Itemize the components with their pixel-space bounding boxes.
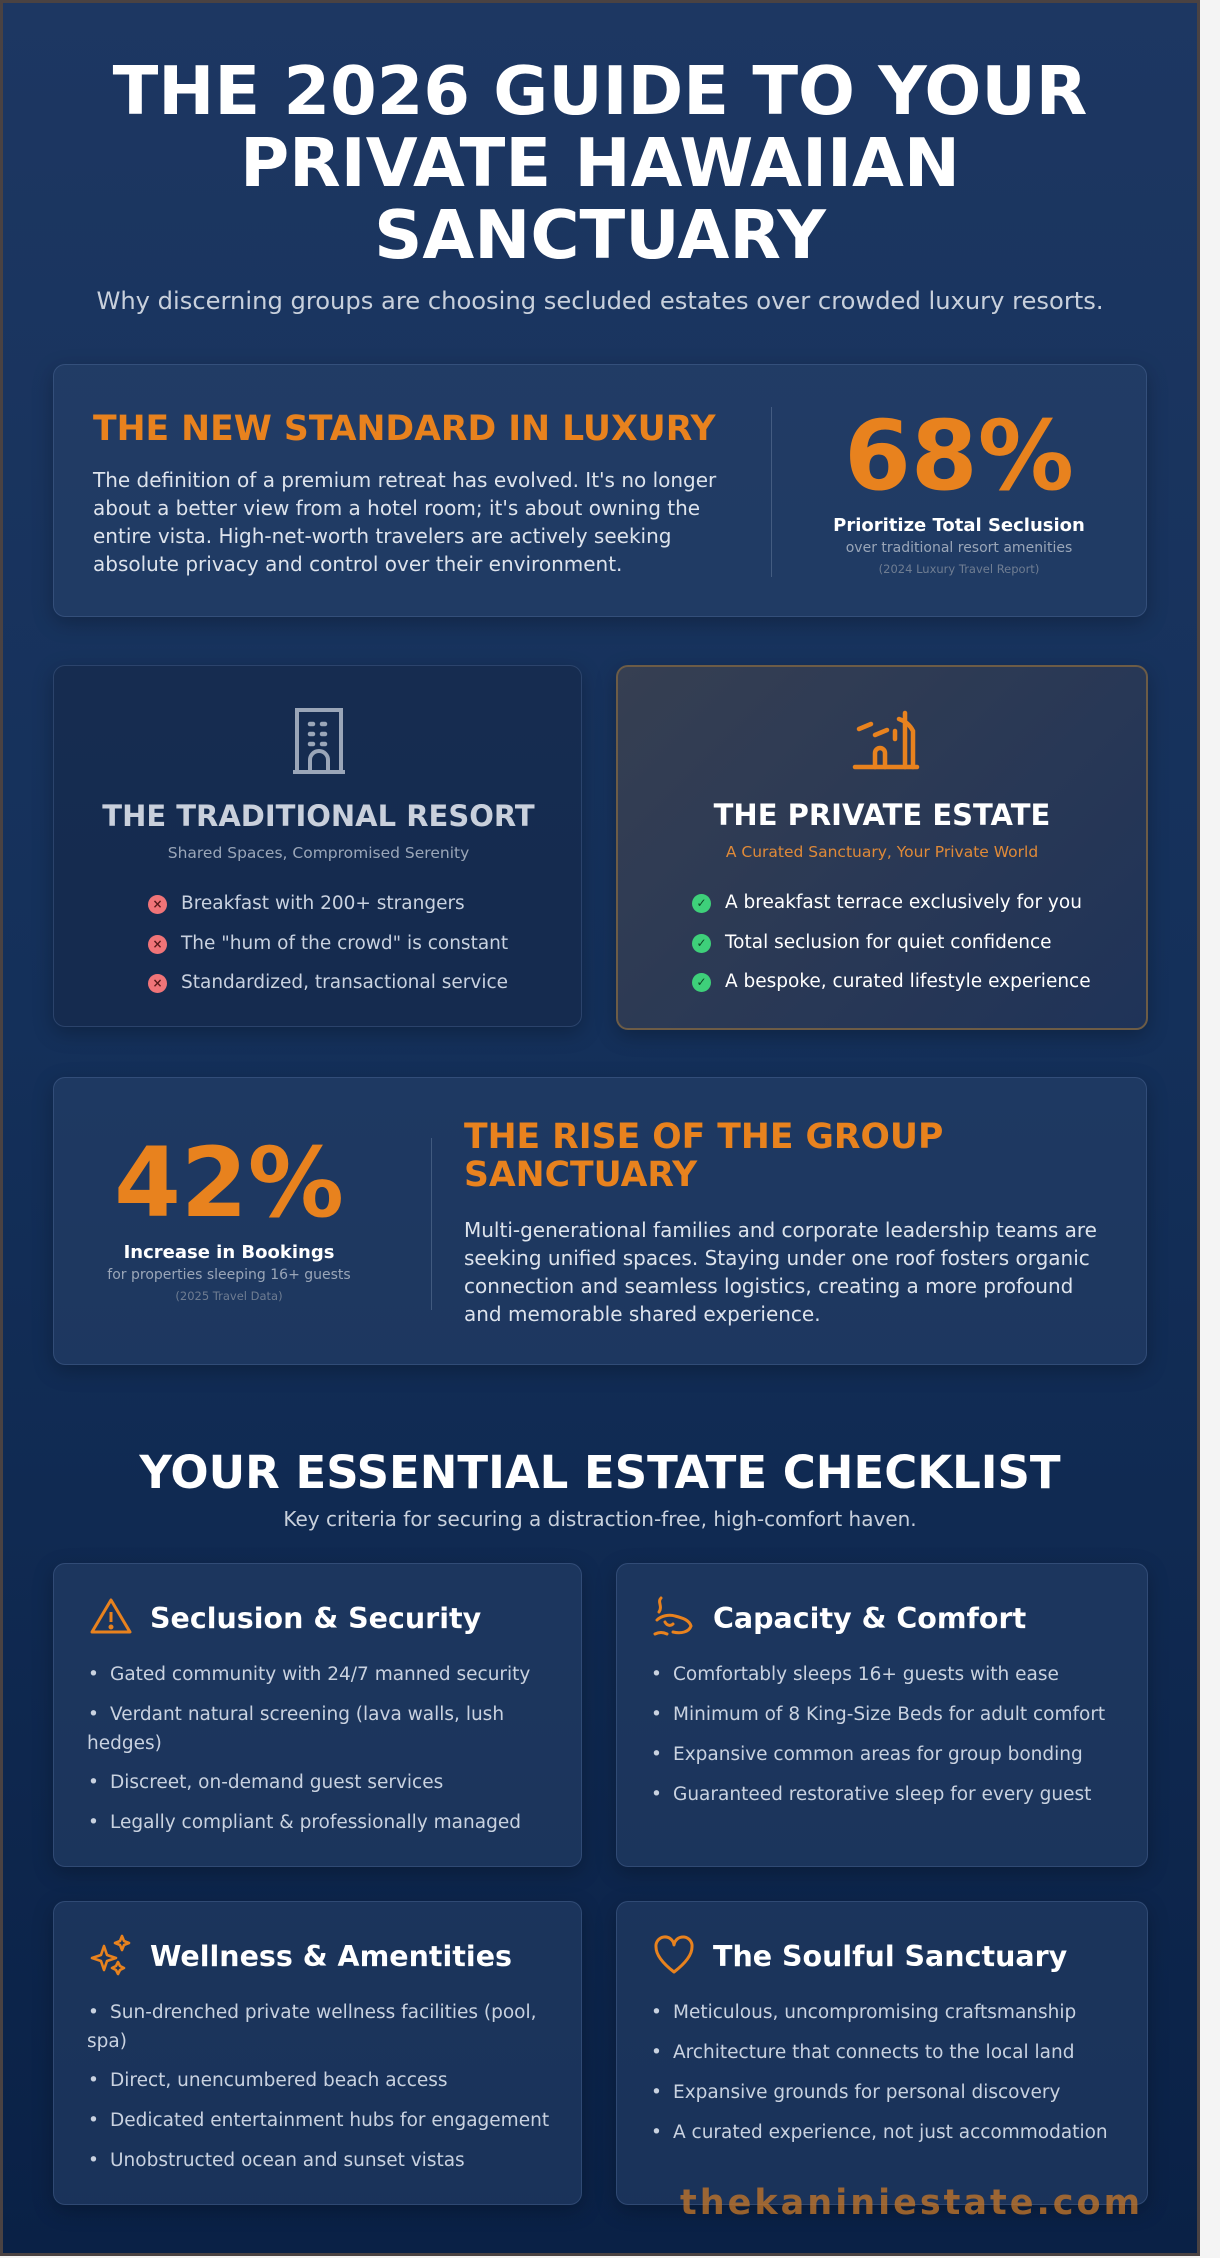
title: Capacity & Comfort [713,1602,1026,1635]
title: Seclusion & Security [150,1602,481,1635]
card: wellness: Direct, unencumbered beach access [110,2070,448,2091]
body text: Multi-generational families and corporate leadership teams are seeking unified spaces. Staying under one roof fosters organic connection and seamless logistics, creating a more profound and memorable shared experience. [464,1218,1097,1326]
list: estate pros [692,892,1091,992]
icon: heart [654,1935,694,1974]
panel: private estate: ✓ [696,896,707,910]
icon: sleeper [653,1596,692,1636]
checklist subtitle: Key criteria for securing a distraction-free, high-comfort haven. [283,1507,917,1531]
panel: traditional resort: × [152,937,163,951]
stat 68%: Prioritize Total Seclusion [833,515,1085,536]
checklist heading: YOUR ESSENTIAL ESTATE CHECKLIST [139,1446,1061,1499]
card: soulful sanctuary [616,1901,1148,2205]
stat 68% [833,400,1085,576]
stat 42%: (2025 Travel Data) [175,1289,283,1303]
panel: traditional resort: × [152,897,163,911]
title: Wellness & Amentities [150,1940,512,1973]
card: wellness: Sun-drenched private wellness facilities (pool, [110,2002,537,2023]
stat 42%: for properties sleeping 16+ guests [107,1267,351,1283]
panel: private estate: ✓ [696,936,707,950]
card: wellness: spa) [87,2031,127,2052]
card: capacity & comfort [616,1563,1148,1867]
stat 42%: 42% [114,1127,344,1239]
subheading: Shared Spaces, Compromised Serenity [168,844,469,862]
stat 68%: over traditional resort amenities [846,540,1072,556]
panel: traditional resort: The "hum of the crowd" is constant [181,933,508,954]
heading: THE NEW STANDARD IN LUXURY [93,409,716,449]
title: THE 2026 GUIDE TO YOUR [113,52,1087,130]
icon: warning [90,1598,132,1634]
subheading: A Curated Sanctuary, Your Private World [726,843,1038,861]
heading: THE PRIVATE ESTATE [714,798,1050,832]
icon: estate [852,710,920,770]
card: soulful sanctuary: A curated experience, not just accommodation [673,2122,1108,2143]
card: wellness: Unobstructed ocean and sunset vistas [110,2150,465,2171]
panel: traditional resort [53,665,582,1027]
panel: traditional resort: Standardized, transactional service [181,972,508,993]
title: SANCTUARY [374,196,826,274]
card: seclusion & security: Discreet, on-demand guest services [110,1772,443,1793]
card: seclusion & security: Verdant natural screening (lava walls, lush [110,1704,504,1725]
card: capacity & comfort: Guaranteed restorative sleep for every guest [673,1784,1091,1805]
card: capacity & comfort: Expansive common areas for group bonding [673,1744,1083,1765]
card: capacity & comfort: Comfortably sleeps 16+ guests with ease [673,1664,1059,1685]
stat 42%: Increase in Bookings [124,1242,334,1263]
panel: new standard [53,364,1147,617]
panel: private estate: A breakfast terrace exclusively for you [725,892,1082,913]
card: seclusion & security: Gated community with 24/7 manned security [110,1664,530,1685]
card: seclusion & security [53,1563,582,1867]
stat 42% [107,1127,351,1303]
card: soulful sanctuary: Expansive grounds for personal discovery [673,2082,1060,2103]
heading: THE TRADITIONAL RESORT [102,799,535,833]
card: soulful sanctuary: Meticulous, uncompromising craftsmanship [673,2002,1076,2023]
title: The Soulful Sanctuary [713,1940,1067,1973]
panel: group sanctuary [53,1077,1147,1365]
subtitle: Why discerning groups are choosing secluded estates over crowded luxury resorts. [96,287,1104,315]
title: PRIVATE HAWAIIAN [240,124,960,202]
heading: THE RISE OF THE GROUP SANCTUARY [464,1117,943,1195]
stat 68%: 68% [844,400,1074,512]
list: resort cons [148,893,508,993]
card: capacity & comfort: Minimum of 8 King-Size Beds for adult comfort [673,1704,1105,1725]
panel: traditional resort: × [152,976,163,990]
card: wellness: Dedicated entertainment hubs for engagement [110,2110,549,2131]
panel: traditional resort: Breakfast with 200+ strangers [181,893,465,914]
stat 68%: (2024 Luxury Travel Report) [879,562,1039,576]
icon: sparkles [90,1934,130,1976]
panel: private estate: Total seclusion for quiet confidence [725,932,1052,953]
title [112,52,1087,274]
icon: building [293,708,345,774]
panel: private estate: ✓ [696,975,707,989]
panel: private estate [616,665,1148,1030]
card: seclusion & security: hedges) [87,1733,162,1754]
card: wellness [53,1901,582,2205]
watermark: thekaniniestate.com [680,2183,1143,2223]
body text: The definition of a premium retreat has evolved. It's no longer about a better view from a hotel room; it's about owning the entire vista. High-net-worth travelers are actively seeking absolute privacy and control over their environment. [93,468,716,576]
panel: private estate: A bespoke, curated lifestyle experience [725,971,1091,992]
card: soulful sanctuary: Architecture that connects to the local land [673,2042,1074,2063]
card: seclusion & security: Legally compliant & professionally managed [110,1812,521,1833]
